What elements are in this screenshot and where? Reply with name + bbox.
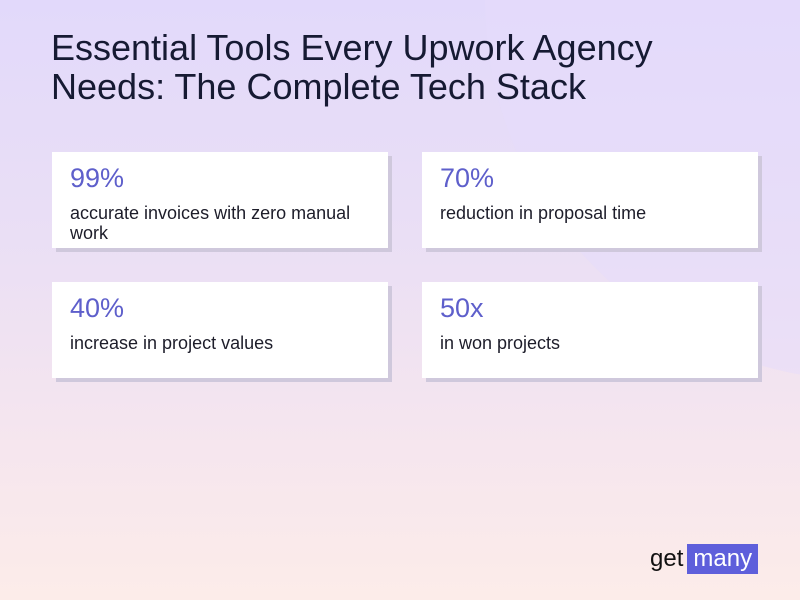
card: 99%: accurate invoices with zero manual work (70, 203, 350, 243)
logo (650, 544, 758, 574)
card: 40%: 40% (70, 293, 124, 323)
card: 40% (52, 282, 388, 378)
card: 70%: reduction in proposal time (440, 203, 646, 223)
card: 50x: 50x (440, 293, 484, 323)
card: 70% (422, 152, 758, 248)
title: Essential Tools Every Upwork Agency (51, 27, 653, 68)
card: 99%: 99% (70, 163, 124, 193)
logo: get (650, 545, 683, 572)
card: 50x: in won projects (440, 333, 560, 353)
card: 99% (52, 152, 388, 248)
logo: many (693, 545, 752, 572)
title (51, 27, 653, 107)
card: 40%: increase in project values (70, 333, 273, 353)
card: 70%: 70% (440, 163, 494, 193)
card: 50x (422, 282, 758, 378)
title: Needs: The Complete Tech Stack (51, 66, 586, 107)
